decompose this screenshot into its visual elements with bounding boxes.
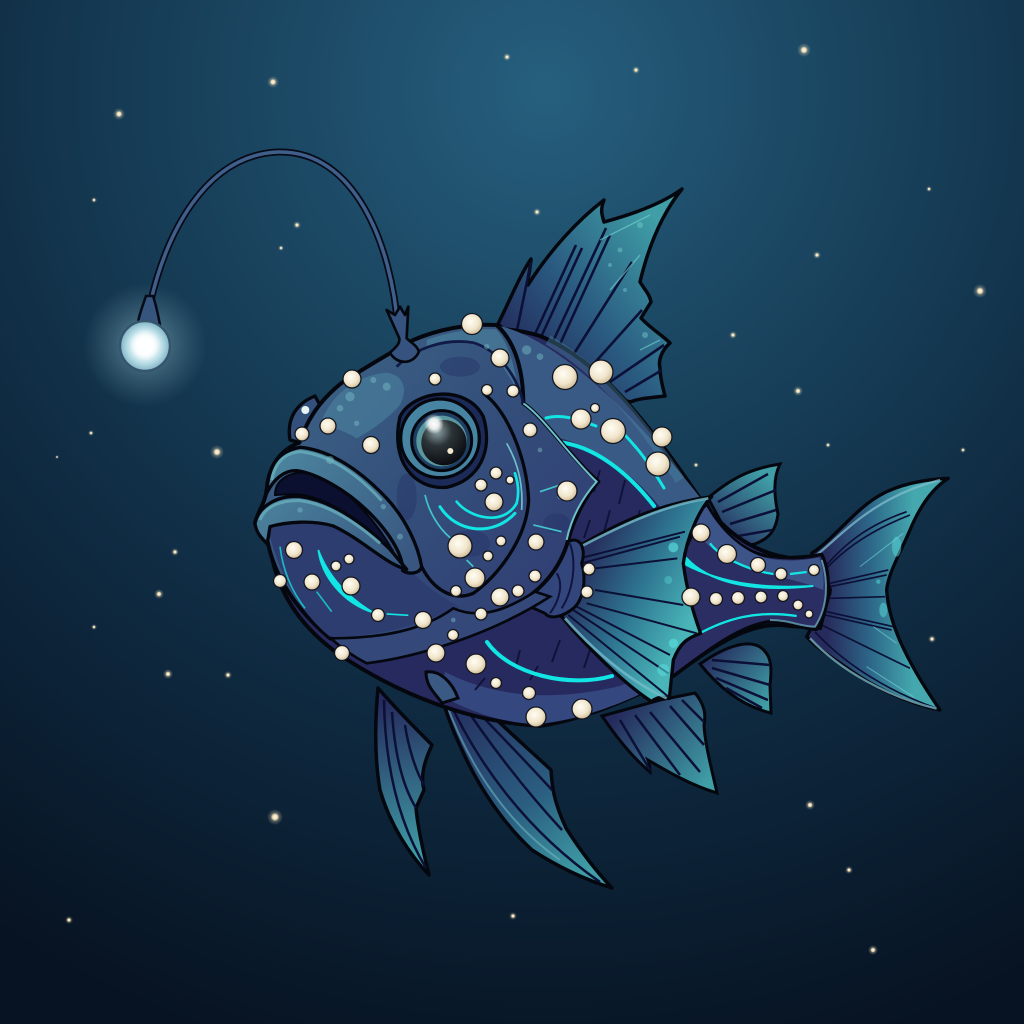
pelvic long fin xyxy=(437,680,612,888)
anal fin xyxy=(700,644,771,713)
chin neon xyxy=(318,550,408,615)
pearl photophores xyxy=(274,314,820,727)
nostril bump xyxy=(289,396,330,443)
dark jaw xyxy=(268,523,460,637)
upper lip xyxy=(267,447,422,573)
right gill rim xyxy=(523,403,597,540)
body neon stripes xyxy=(487,416,664,680)
nostril gloss xyxy=(301,406,309,414)
shoulder highlight xyxy=(427,329,518,393)
eye xyxy=(401,399,479,478)
cheek swirls xyxy=(440,473,518,529)
lure rod xyxy=(150,152,398,330)
pelvic fin knob xyxy=(426,672,458,703)
back speckles xyxy=(548,340,680,480)
mouth opening xyxy=(275,473,393,552)
ventral rear fin xyxy=(602,693,717,793)
scale marks xyxy=(475,470,730,690)
eye socket shadow xyxy=(398,394,487,487)
dorsal fin xyxy=(498,189,682,402)
tail fin xyxy=(807,478,948,710)
skin speckles xyxy=(297,344,563,622)
lure glow xyxy=(83,283,207,407)
lower collar xyxy=(331,592,550,663)
forehead plate xyxy=(320,373,404,438)
pectoral lower front fin xyxy=(376,688,432,875)
tail peduncle xyxy=(672,503,828,677)
upper back band xyxy=(500,326,702,507)
head xyxy=(255,307,598,663)
head plate xyxy=(255,325,598,644)
second dorsal fin xyxy=(708,464,780,548)
lure bulb xyxy=(120,296,170,371)
gill cover xyxy=(422,393,529,596)
lower lip xyxy=(255,496,407,569)
pectoral fin xyxy=(530,497,712,702)
fish body xyxy=(269,326,830,726)
lower belly band xyxy=(440,664,674,724)
shadow blotches xyxy=(397,357,570,557)
lure base xyxy=(387,307,419,362)
